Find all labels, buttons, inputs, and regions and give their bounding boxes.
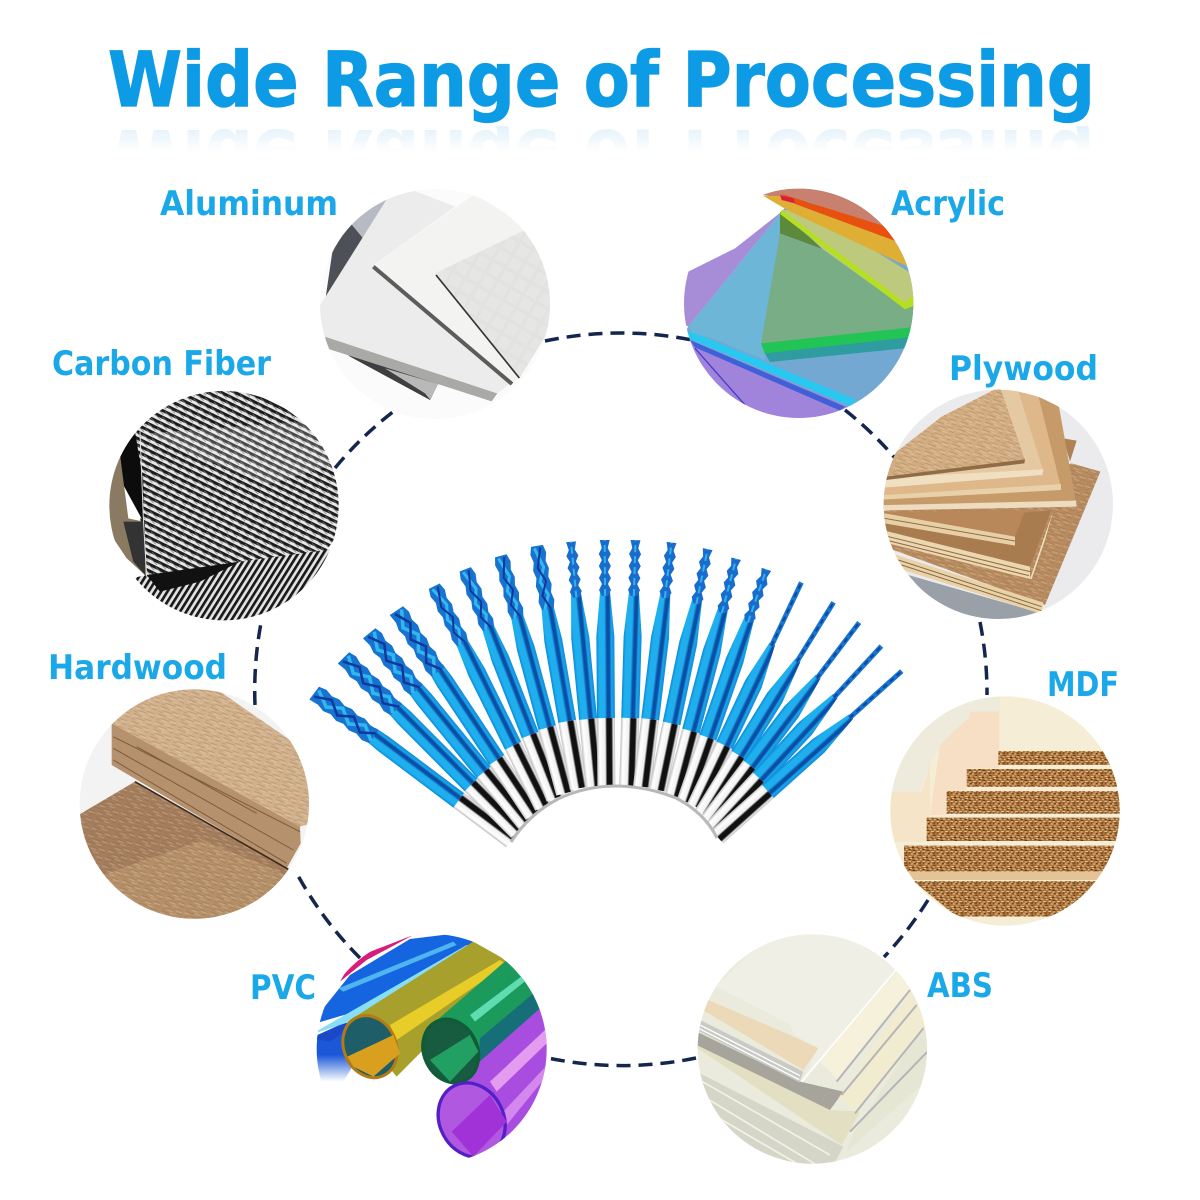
label: Aluminum: Aluminum bbox=[160, 184, 338, 224]
panel: hardwood image bbox=[80, 689, 309, 919]
panel: carbon fiber image bbox=[109, 391, 339, 620]
label: Carbon Fiber: Carbon Fiber bbox=[52, 344, 271, 384]
label: Hardwood: Hardwood bbox=[48, 648, 227, 688]
inner arc edge of shanks bbox=[511, 786, 717, 842]
panel: PVC image bbox=[316, 934, 547, 1158]
panel: ABS image bbox=[698, 934, 927, 1164]
title reflection bbox=[119, 126, 1090, 144]
panel: plywood image bbox=[884, 390, 1113, 619]
central fan of blue-coated end mill bits bbox=[309, 540, 908, 848]
dashed connector ring bbox=[255, 333, 987, 1066]
label: ABS: ABS bbox=[927, 966, 993, 1006]
label: PVC: PVC bbox=[250, 968, 316, 1008]
panel: MDF image bbox=[890, 696, 1120, 926]
panel: acrylic image bbox=[684, 188, 914, 418]
title: Wide Range of Processing bbox=[108, 35, 1095, 124]
title reflection: Wide Range of Processing bbox=[108, 112, 1095, 201]
label: MDF: MDF bbox=[1047, 665, 1119, 705]
label: Plywood: Plywood bbox=[949, 349, 1098, 389]
label: Acrylic: Acrylic bbox=[891, 184, 1005, 224]
panel: aluminum image bbox=[320, 191, 550, 402]
